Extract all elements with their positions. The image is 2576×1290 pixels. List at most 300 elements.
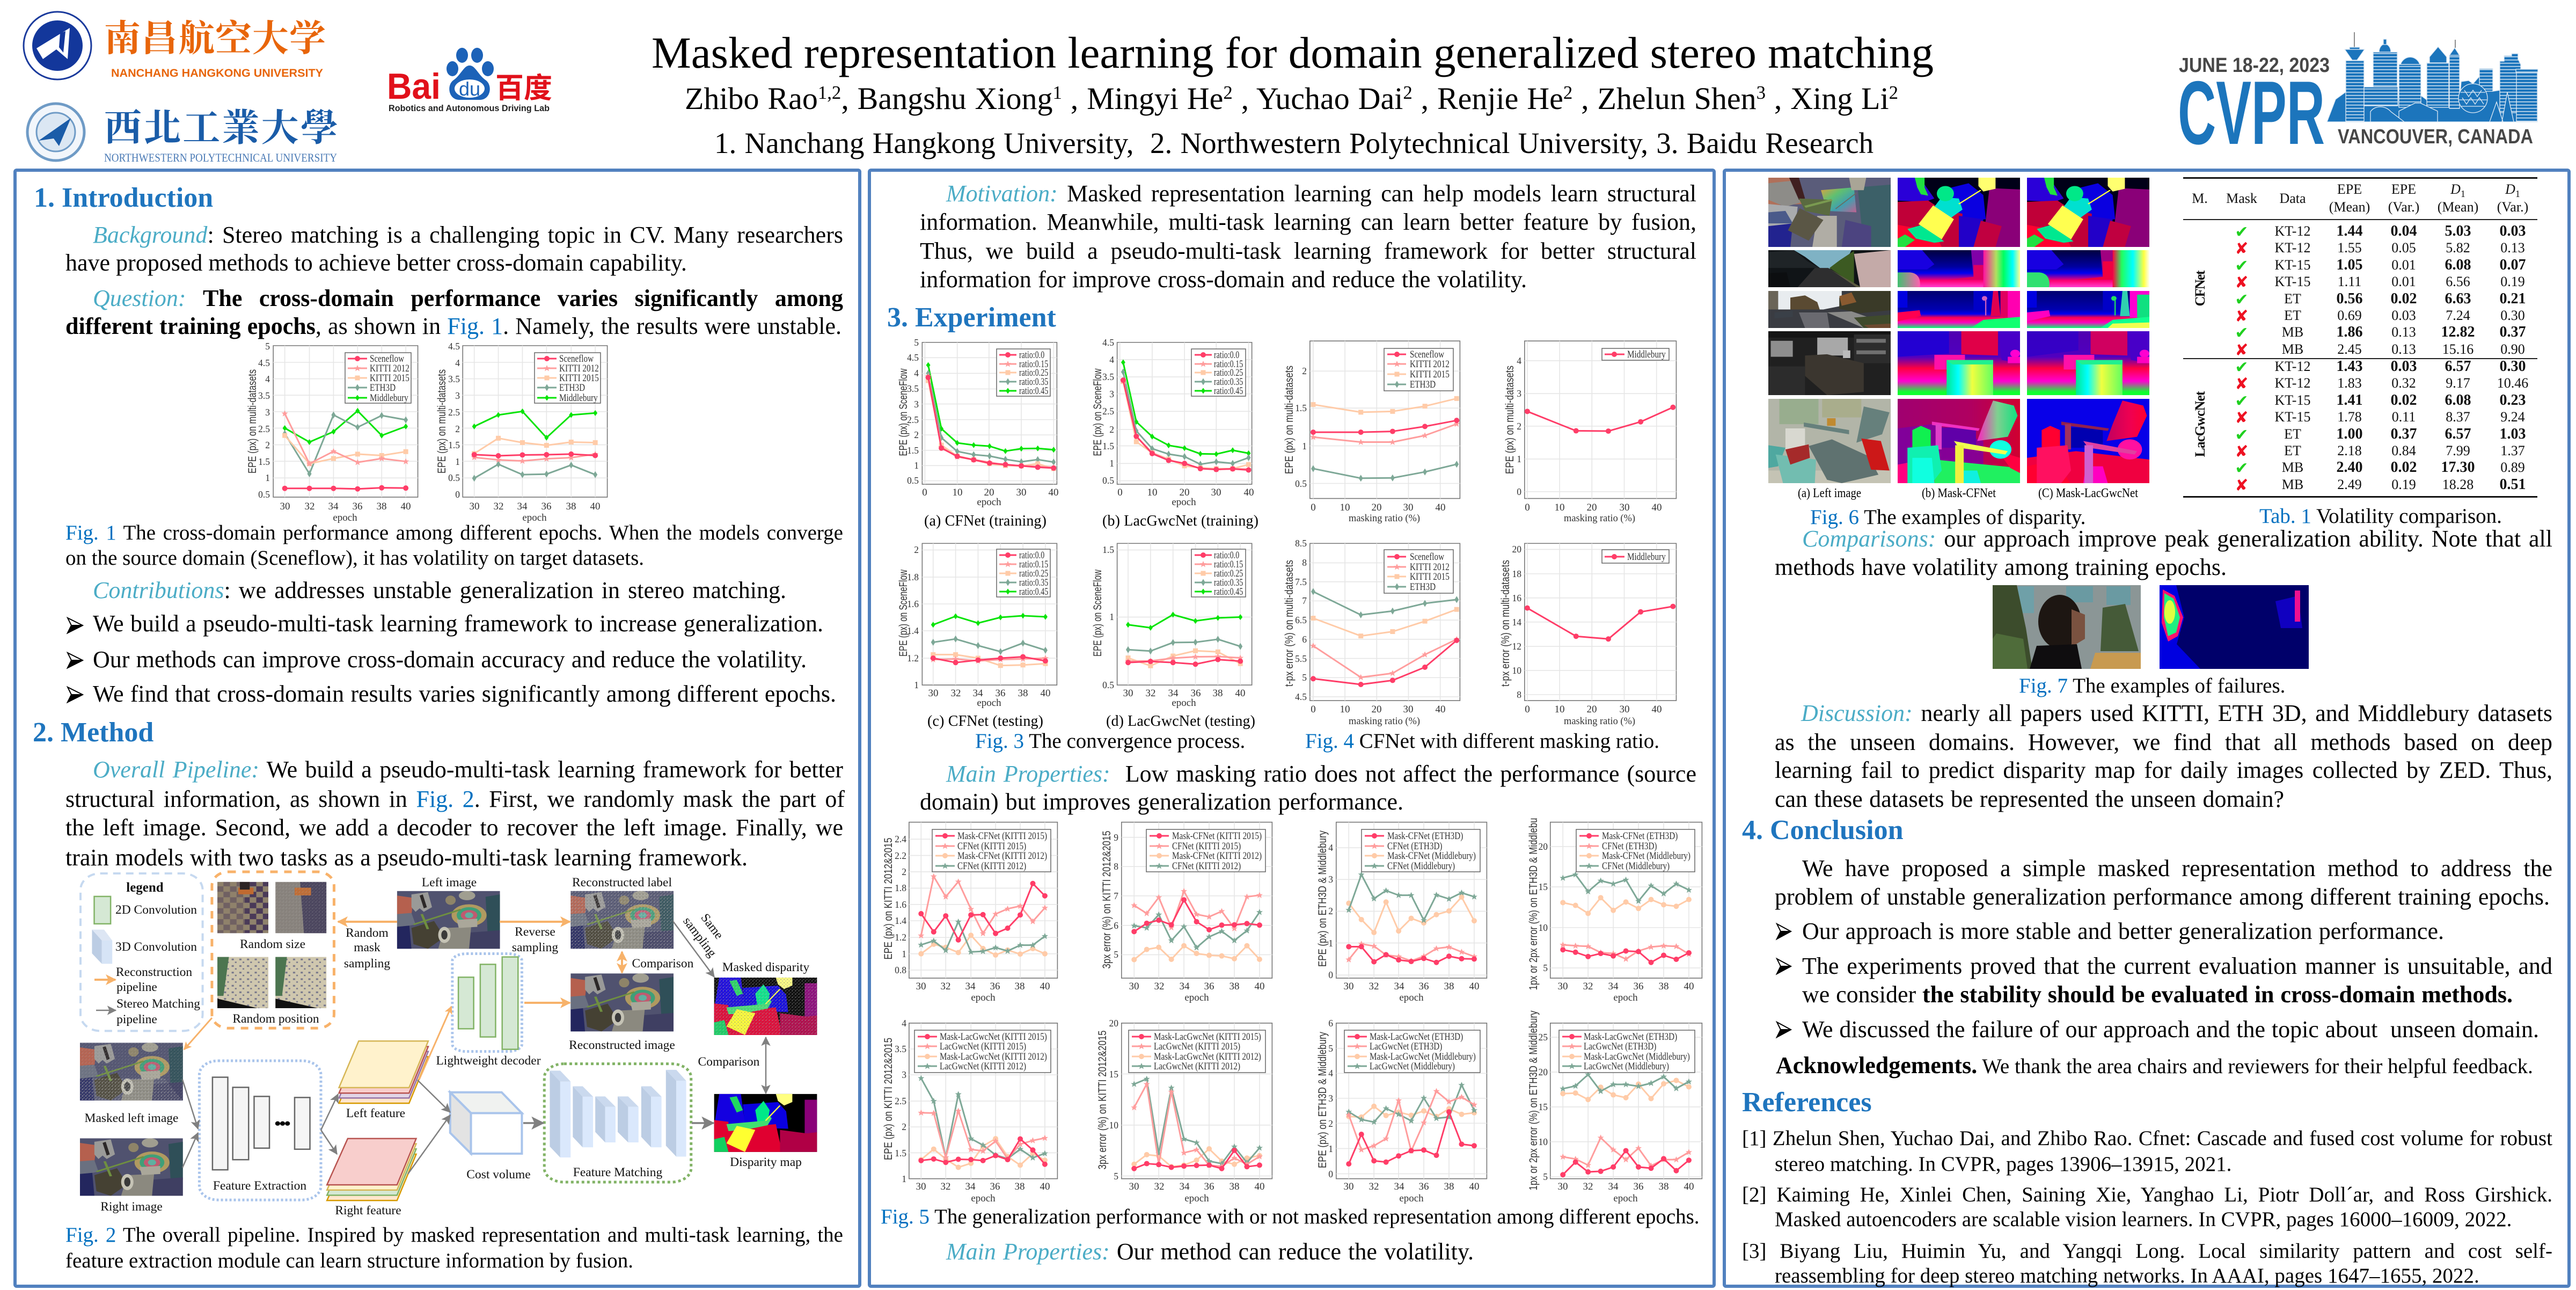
chart: Fig 5 Mask-CFNet EPE ETH3D Middlebury: 32 [1368,981,1379,992]
logo: Baidu: Robotics and Autonomous Driving Lab [389,103,550,113]
caption: Fig 7: Fig. 7 The examples of failures. [2019,674,2285,697]
CFNet rows: ✘ [2235,239,2249,258]
legend: KITTI 2012 [1410,358,1450,369]
chart: Fig 4 EPE vs masking ratio: 2 [1302,366,1307,376]
CFNet rows: 0.03 [2391,308,2416,323]
location: VANCOUVER, CANADA [2338,126,2533,148]
labels: Reconstruction [116,965,192,979]
chart: Fig 5 Mask-LacGwcNet 1px or 2px ETH3D Middlebury: epoch [1613,1193,1638,1204]
chart: Fig 3a CFNet training [897,337,1058,508]
chart: Fig 4 EPE vs masking ratio: 30 [1403,502,1414,513]
chart: Fig 1 left, EPE on multi-datasets: 2 [265,440,270,450]
image captions: (b) Mask-CFNet [1922,486,1996,500]
row 5 [1768,399,2149,483]
chart: Fig 3c CFNet testing: EPE (px) on SceneFlow [897,569,910,657]
panel: right column frame [1724,170,2569,1286]
logo: CVPR 2023 Vancouver [2178,32,2538,163]
LacGwcNet rows: KT-15 [2275,392,2310,408]
chart: Fig 3d LacGwcNet testing: 38 [1213,688,1223,699]
table header: EPE [2337,181,2362,197]
text: discussion: as the unseen domains. However, we find that all methods based on deep [1775,729,2552,755]
chart: Fig 4 t-px error Middlebury: 12 [1512,641,1521,652]
text: comparisons [1775,525,2552,581]
chart: Fig 1 right, EPE on multi-datasets: 2.5 [448,407,460,418]
LacGwcNet rows: 1.41 [2337,392,2362,409]
chart: Fig 5 Mask-CFNet 3px KITTI: 6 [1114,920,1118,931]
legend: Mask-LacGwcNet (KITTI 2015) [1154,1031,1261,1042]
chart: Fig 5 Mask-LacGwcNet EPE KITTI: epoch [971,1193,996,1204]
chart: Fig 4 t-px error Middlebury: 16 [1512,593,1521,603]
CFNet rows: KT-15 [2275,274,2310,289]
labels [85,876,810,1218]
labels: Reconstructed image [569,1038,675,1052]
chart: Fig 5 Mask-CFNet EPE ETH3D Middlebury: 30 [1344,981,1353,992]
chart: Fig 5 Mask-CFNet 3px KITTI: 7 [1114,891,1118,901]
LacGwcNet rows: 0.37 [2390,426,2417,442]
chart: Fig 4 EPE Middlebury: 0 [1517,486,1521,497]
chart: Fig 3a CFNet training: 1.5 [907,445,919,456]
labels: Comparison [698,1055,760,1069]
CFNet rows: 0.01 [2391,257,2416,273]
CFNet rows: 0.07 [2500,257,2526,273]
chart: Fig 5 Mask-LacGwcNet 3px KITTI: 38 [1229,1181,1240,1192]
images [397,891,500,949]
legend: CFNet (KITTI 2012) [1172,860,1241,871]
chart: Fig 5 Mask-LacGwcNet EPE ETH3D Middlebury [1316,1018,1487,1204]
rotated labels: CFNet [2192,270,2208,306]
chart: Fig 5 Mask-CFNet EPE KITTI: EPE (px) on KITTI 2012&2015 [882,837,895,960]
labels: Masked left image [85,1111,178,1125]
chart: Fig 3b LacGwcNet training: 0.5 [1102,475,1114,486]
legend: LacGwcNet (KITTI 2012) [940,1060,1026,1072]
labels: Right feature [335,1204,401,1218]
chart: Fig 3c CFNet testing: 1.8 [907,572,919,582]
chart: Fig 1 left, EPE on multi-datasets: 32 [305,501,314,512]
legend: Mask-CFNet (Middlebury) [1387,850,1476,861]
legend [1344,1030,1480,1073]
legend: ETH3D [1410,581,1436,592]
LacGwcNet rows [2235,358,2528,495]
chart: Fig 5 Mask-CFNet EPE KITTI: 38 [1014,981,1025,992]
LacGwcNet rows: 17.30 [2441,459,2475,476]
list: references: Masked autoencoders are scalable vision learners. In CVPR, pages 16000–16009, 2022. [1775,1208,2512,1231]
chart: Fig 5 Mask-LacGwcNet EPE KITTI: 3.5 [895,1044,906,1054]
chart: Fig 4 t-px error Middlebury: 30 [1620,704,1629,715]
LacGwcNet rows: 0.30 [2500,358,2526,375]
text: motivation: Thus, we build a pseudo-multi-task learning framework for better structural [920,238,1696,264]
chart: Fig 3c CFNet testing: 1.2 [907,653,919,664]
chart: Fig 3d LacGwcNet testing: 36 [1190,688,1201,699]
chart: Fig 5 Mask-LacGwcNet EPE KITTI: 38 [1014,1181,1025,1192]
chart: Fig 5 Mask-CFNet EPE KITTI: 1 [902,949,906,959]
chart: Fig 5 Mask-LacGwcNet 3px KITTI: 20 [1109,1018,1118,1029]
legend [1191,549,1246,597]
text: discussion [1775,699,2552,813]
chart: Fig 3d LacGwcNet testing: 40 [1235,688,1245,699]
LacGwcNet rows: 9.24 [2500,409,2525,425]
chart: Fig 5 Mask-LacGwcNet EPE KITTI: EPE (px) on KITTI 2012&2015 [882,1038,895,1160]
LacGwcNet rows: 8.37 [2446,409,2470,425]
LacGwcNet rows: 2.49 [2337,477,2362,492]
legend [932,829,1051,872]
chart: Fig 5 Mask-LacGwcNet EPE KITTI [882,1018,1057,1204]
text: question [65,285,843,339]
legend [535,353,601,403]
legend: Sceneflow [370,353,405,364]
chart: Fig 3b LacGwcNet training: 4.5 [1102,337,1114,348]
chart: Fig 5 Mask-CFNet EPE KITTI: 0.8 [895,965,906,975]
labels: pipeline [116,1012,157,1026]
LacGwcNet rows: 1.00 [2337,426,2362,442]
chart: Fig 4 EPE Middlebury: 40 [1652,502,1662,513]
chart: Fig 5 Mask-CFNet 3px KITTI: 38 [1229,981,1240,992]
LacGwcNet rows: ✘ [2235,409,2249,427]
chart: Fig 1 left, EPE on multi-datasets: 3.5 [258,390,270,401]
text: acknowledgements: Acknowledgements. We thank the area chairs and reviewers for their helpful feedback. [1776,1052,2533,1078]
legend: CFNet (KITTI 2012) [957,860,1026,871]
table header: (Mean) [2329,199,2370,215]
LacGwcNet rows: ✘ [2235,375,2249,393]
CFNet rows: 5.82 [2446,240,2470,256]
chart: Fig 5 Mask-LacGwcNet EPE ETH3D Middlebury: 4 [1328,1068,1333,1078]
legend: Mask-CFNet (ETH3D) [1387,830,1463,841]
CFNet rows: 0.19 [2500,274,2525,289]
chart: Fig 4 t-px error Middlebury [1499,543,1676,727]
chart: Fig 4 EPE Middlebury: 1 [1517,454,1521,464]
CFNet rows: 0.13 [2391,324,2416,340]
caption: Fig 1: on the source domain (Sceneflow), it has volatility on target datasets. [65,546,644,570]
text: discussion: Discussion: nearly all papers used KITTI, ETH 3D, and Middlebury datasets [1801,700,2552,726]
LacGwcNet rows: ✔ [2235,392,2249,411]
chart: Fig 4 t-px error multi-datasets: 4.5 [1295,691,1307,702]
legend: ratio:0.0 [1214,349,1239,361]
captions: Fig 3 bottom row [927,713,1255,730]
chart: Fig 3b LacGwcNet training: 30 [1211,487,1221,498]
LacGwcNet rows: 0.02 [2390,459,2417,476]
legend: Mask-LacGwcNet (Middlebury) [1370,1051,1476,1062]
CFNet rows: KT-12 [2275,240,2310,256]
chart: Fig 4 EPE vs masking ratio: EPE (px) on multi-datasets [1283,366,1296,474]
legend [1191,349,1246,397]
LacGwcNet rows: ET [2284,426,2301,442]
chart: Fig 4 t-px error multi-datasets [1283,538,1460,727]
text: discussion: learning fail to predict disparity map for daily images collected by ZED. Thus, [1775,757,2552,783]
chart: Fig 5 Mask-CFNet EPE ETH3D Middlebury [1316,822,1487,1003]
row 2 [1768,250,2149,287]
text: main properties 1 [920,760,1696,817]
chart: Fig 3a CFNet training: 2 [914,429,919,440]
panel: middle column frame [869,170,1714,1286]
chart: Fig 4 t-px error Middlebury: 18 [1512,569,1521,579]
chart: Fig 5 Mask-CFNet 1px or 2px ETH3D Middlebury: 34 [1608,981,1619,992]
legend: Middlebury [1627,348,1666,360]
chart: Fig 3b LacGwcNet training: 2 [1109,424,1114,435]
text: background [65,222,843,276]
chart: Fig 5 Mask-LacGwcNet EPE KITTI: 34 [965,1181,976,1192]
labels: Random size [240,937,305,951]
chart: Fig 1 right, EPE on multi-datasets: 30 [469,501,480,512]
chart: Fig 5 Mask-LacGwcNet EPE ETH3D Middlebury: 0 [1328,1169,1333,1179]
chart: Fig 4 EPE Middlebury: 20 [1586,502,1597,513]
chart: Fig 3b LacGwcNet training: EPE (px) on SceneFlow [1092,368,1104,456]
chart: Fig 3c CFNet testing [897,543,1057,709]
table header: D [2505,181,2515,197]
legend: Mask-CFNet (KITTI 2012) [1172,850,1262,861]
text: motivation [920,180,1696,294]
labels: Same [698,911,726,942]
labels: Disparity map [730,1155,802,1169]
chart: Fig 5 Mask-CFNet EPE KITTI: 1.8 [895,883,906,893]
legend: ratio:0.45 [1214,586,1243,597]
legend: LacGwcNet (KITTI 2012) [1154,1060,1240,1072]
table header: 1 [2461,188,2465,199]
labels: sampling [344,957,390,971]
table: Tab 1 volatility comparison [2183,178,2537,497]
chart: Fig 3a CFNet training: 40 [1049,487,1058,498]
CFNet rows: 7.24 [2446,308,2470,323]
chart: Fig 3d LacGwcNet testing: 1.5 [1102,544,1114,555]
legend: Mask-CFNet (KITTI 2015) [1172,830,1262,841]
chart: Fig 3a CFNet training: 2.5 [907,414,919,425]
chart: Fig 5 Mask-CFNet EPE KITTI [882,822,1057,1003]
CFNet rows: ✘ [2235,307,2249,326]
rotated labels [2192,270,2208,457]
CFNet rows: 6.56 [2446,274,2470,289]
legend: Mask-LacGwcNet (KITTI 2012) [1154,1051,1261,1062]
labels: legend [126,880,164,895]
legend: ratio:0.45 [1214,385,1243,397]
chart: Fig 5 Mask-LacGwcNet 3px KITTI: 15 [1109,1069,1118,1080]
chart: Fig 4 EPE vs masking ratio: 10 [1340,502,1350,513]
chart: Fig 3c CFNet testing: 40 [1040,688,1051,699]
chart: Fig 5 Mask-LacGwcNet 1px or 2px ETH3D Middlebury [1527,1010,1702,1204]
legend: Mask-CFNet (KITTI 2015) [957,830,1047,841]
legend: CFNet (ETH3D) [1602,840,1657,851]
chart: Fig 5 Mask-CFNet 3px KITTI: 34 [1180,981,1190,992]
chart: Fig 4 t-px error multi-datasets: 40 [1435,704,1446,715]
list: contributions: Our methods can improve cross-domain accuracy and reduce the volatility. [93,646,807,673]
chart: Fig 3a CFNet training: 20 [984,487,994,498]
text: question: Question: The cross-domain performance varies significantly among [93,285,843,311]
chart: Fig 3a CFNet training: 0.5 [907,475,919,486]
chart: Fig 5 Mask-LacGwcNet EPE ETH3D Middlebury: 3 [1328,1093,1333,1104]
chart: Fig 4 t-px error multi-datasets: masking ratio (%) [1349,716,1420,727]
chart: Fig 3d LacGwcNet testing: 30 [1123,688,1133,699]
chart: Fig 5 Mask-LacGwcNet EPE ETH3D Middlebury: 5 [1328,1043,1333,1054]
chart: Fig 4 EPE Middlebury: masking ratio (%) [1564,513,1635,524]
chart: Fig 5 Mask-CFNet 3px KITTI: 3px error (%) on KITTI 2012&2015 [1101,831,1113,968]
chart: Fig 5 Mask-CFNet EPE KITTI: 36 [990,981,1000,992]
chart: Fig 5 Mask-LacGwcNet 1px or 2px ETH3D Middlebury: 36 [1634,1181,1643,1192]
chart: Fig 5 Mask-CFNet EPE ETH3D Middlebury: 1 [1328,938,1333,949]
chart: Fig 4 t-px error Middlebury: 40 [1652,704,1662,715]
legend: CFNet (KITTI 2015) [1172,840,1241,851]
random mask samples box [212,872,334,1028]
logo text: NCHU Chinese: 南昌航空大学 [104,18,326,59]
chart: Fig 3b LacGwcNet training: epoch [1172,497,1196,508]
chart: Fig 5 Mask-LacGwcNet 1px or 2px ETH3D Middlebury: 5 [1543,1171,1548,1182]
chart: Fig 4 t-px error Middlebury: 10 [1512,665,1521,676]
LacGwcNet rows: KT-15 [2275,409,2310,425]
legend: ratio:0.15 [1214,358,1243,370]
chart: Fig 5 Mask-LacGwcNet EPE KITTI: 30 [916,1181,926,1192]
text: discussion: can these datasets be represented the unseen domain? [1775,786,2284,812]
chart: Fig 4 t-px error multi-datasets: 6 [1302,634,1307,645]
logo: Nanchang Hangkong University [24,12,326,79]
chart: Fig 4 t-px error Middlebury: 8 [1517,689,1521,700]
arrows [94,921,766,1174]
legend: Middlebury [1627,551,1666,562]
caption: Fig 2: feature extraction module can learn structure information by fusion. [65,1249,633,1272]
legend: LacGwcNet (ETH3D) [1370,1040,1442,1052]
chart: Fig 1 left, EPE on multi-datasets: 2.5 [258,424,270,434]
labels: Masked disparity [722,960,810,974]
chart: Fig 5 Mask-LacGwcNet 1px or 2px ETH3D Middlebury: 25 [1538,1032,1548,1043]
chart: Fig 3a CFNet training: 30 [1016,487,1026,498]
chart: Fig 5 Mask-CFNet 1px or 2px ETH3D Middlebury: epoch [1613,992,1638,1003]
chart: Fig 5 Mask-CFNet 1px or 2px ETH3D Middlebury: 1px or 2px error (%) on ETH3D & Middlebu [1527,818,1540,990]
list: conclusion: we consider the stability should be evaluated in cross-domain methods. [1802,981,2513,1008]
chart: Fig 3a CFNet training: 4 [914,368,919,378]
labels: 3D Convolution [115,940,197,954]
chart: Fig 5 Mask-LacGwcNet 1px or 2px ETH3D Middlebury: 30 [1557,1181,1568,1192]
chart: Fig 5 Mask-LacGwcNet 1px or 2px ETH3D Middlebury: 32 [1583,1181,1593,1192]
chart: Fig 1 right, EPE on multi-datasets [436,341,608,523]
chart: Fig 4 t-px error multi-datasets: 5 [1302,672,1307,683]
chart: Fig 5 Mask-LacGwcNet EPE KITTI: 36 [990,1181,1000,1192]
chart: Fig 5 Mask-LacGwcNet 3px KITTI: epoch [1184,1193,1209,1204]
text: motivation: information for improve cross-domain and reduce the volatility. [920,266,1527,293]
caption: Fig 1 [65,519,843,575]
chart: Fig 1 left, EPE on multi-datasets: 1 [265,472,270,483]
title: Masked representation learning for domain generalized stereo matching [652,28,1934,77]
chart: Fig 3c CFNet testing: 32 [951,688,961,699]
CFNet rows: ✘ [2235,341,2249,360]
LacGwcNet rows: ET [2284,443,2301,458]
list: conclusion: Our approach is more stable and better generalization performance. [1802,918,2444,944]
legend: Mask-LacGwcNet (Middlebury) [1584,1051,1690,1062]
labels: Left image [422,876,477,890]
date: JUNE 18-22, 2023 [2179,54,2330,77]
chart: Fig 5 Mask-CFNet EPE KITTI: 34 [965,981,976,992]
chart: Fig 5 Mask-LacGwcNet 3px KITTI: 3px error (%) on KITTI 2012&2015 [1096,1031,1109,1169]
chart: Fig 5 Mask-LacGwcNet EPE ETH3D Middlebury: epoch [1399,1193,1424,1204]
legend [1129,1030,1265,1073]
chart: Fig 5 Mask-CFNet EPE ETH3D Middlebury: 36 [1419,981,1429,992]
list: conclusion: We discussed the failure of our approach and the topic about unseen domain. [1802,1016,2539,1043]
legend: ratio:0.25 [1019,567,1048,579]
chart: Fig 5 Mask-LacGwcNet EPE KITTI: 1.5 [895,1148,906,1158]
chart: Fig 3b LacGwcNet training: 40 [1244,487,1254,498]
chart: Fig 3d LacGwcNet testing: epoch [1172,697,1196,709]
chart: Fig 5 Mask-LacGwcNet EPE ETH3D Middlebury: 6 [1328,1018,1333,1029]
legend: ratio:0.0 [1019,349,1044,361]
caption: Fig 4: Fig. 4 CFNet with different masking ratio. [1305,730,1659,753]
text: conclusion: We have proposed a simple masked representation method to address the [1802,855,2552,881]
chart: Fig 1 right, EPE on multi-datasets: 4.5 [448,341,460,352]
heading: References: References [1742,1087,1872,1118]
CFNet rows: 0.56 [2337,290,2362,307]
CFNet rows: 0.13 [2391,341,2416,357]
LacGwcNet rows: 2.40 [2337,459,2362,476]
chart: Fig 5 Mask-CFNet EPE ETH3D Middlebury: 3 [1328,874,1333,885]
chart: Fig 5 Mask-LacGwcNet 3px KITTI: 40 [1255,1181,1264,1192]
legend: ratio:0.15 [1019,558,1048,570]
chart: Fig 4 t-px error multi-datasets: 6.5 [1295,615,1307,625]
LacGwcNet rows: 6.57 [2445,358,2471,375]
chart: Fig 1 right, EPE on multi-datasets: 1.5 [448,440,460,450]
labels: Random position [232,1012,319,1026]
chart: Fig 1 right, EPE on multi-datasets: 0 [455,489,460,500]
labels: Left feature [346,1106,405,1120]
row 3 [1768,291,2149,328]
CFNet rows: 1.86 [2337,324,2362,340]
chart: Fig 4 EPE vs masking ratio: 1 [1302,441,1307,451]
chart: Fig 4 t-px error multi-datasets: 5.5 [1295,653,1307,664]
chart: Fig 1 left, EPE on multi-datasets: 38 [377,501,386,512]
logo: Baidu: du [459,78,480,100]
chart: Fig 5 Mask-LacGwcNet EPE ETH3D Middlebury: 1 [1328,1143,1333,1154]
legend: ratio:0.45 [1019,586,1048,597]
legend: KITTI 2015 [1410,368,1450,380]
text: overall pipeline: the left image. Second, we add a decoder to recover the left image. Finally, we [65,814,843,841]
legend: Mask-LacGwcNet (ETH3D) [1584,1031,1677,1042]
chart: Fig 5 Mask-LacGwcNet 1px or 2px ETH3D Middlebury: 1px or 2px error (%) on ETH3D & Middlebury [1527,1010,1540,1191]
chart: Fig 1 left, EPE on multi-datasets: EPE (px) on multi-datasets [246,369,259,473]
rotated labels: LacGwcNet [2192,391,2208,457]
chart: Fig 5 Mask-LacGwcNet EPE KITTI: 1 [902,1174,906,1184]
chart: Fig 4 t-px error multi-datasets: 7 [1302,595,1307,606]
chart: Fig 5 Mask-LacGwcNet EPE KITTI: 32 [940,1181,951,1192]
legend: KITTI 2012 [370,362,409,374]
feature extraction [199,1061,321,1200]
legend: CFNet (Middlebury) [1602,860,1670,871]
chart: Fig 3c CFNet testing: 38 [1018,688,1028,699]
legend: LacGwcNet (Middlebury) [1370,1060,1455,1072]
legend: ratio:0.35 [1019,577,1048,588]
legend: CFNet (Middlebury) [1387,860,1455,871]
chart: Fig 5 Mask-CFNet 1px or 2px ETH3D Middlebury: 15 [1538,881,1548,892]
chart: Fig 5 Mask-LacGwcNet EPE ETH3D Middlebury: 32 [1368,1181,1379,1192]
legend: ratio:0.0 [1214,549,1239,561]
LacGwcNet rows: 2.18 [2337,443,2362,458]
legend: Mask-CFNet (ETH3D) [1602,830,1678,841]
CFNet rows: ✔ [2235,324,2249,342]
legend: LacGwcNet (KITTI 2015) [1154,1040,1240,1052]
caption: Fig 1: Fig. 1 The cross-domain performance among different epochs. When the models converge [65,521,843,544]
logo: Northwestern Polytechnical University [27,104,338,164]
LacGwcNet rows: 9.17 [2446,375,2470,391]
chart: Fig 4 EPE Middlebury: EPE (px) on multi-datasets [1504,366,1516,474]
chart: Fig 5 Mask-CFNet EPE KITTI: 30 [916,981,926,992]
chart: Fig 4 EPE vs masking ratio: 20 [1372,502,1381,513]
CFNet rows: 0.04 [2390,223,2417,239]
legend [1602,348,1669,360]
chart: Fig 5 Mask-CFNet 3px KITTI: 9 [1114,832,1118,843]
chart: Fig 5 Mask-LacGwcNet 1px or 2px ETH3D Middlebury: 40 [1684,1181,1694,1192]
chart: Fig 4 t-px error multi-datasets: 7.5 [1295,577,1307,587]
chart: Fig 3c CFNet testing: 1.6 [907,599,919,609]
legend [1362,829,1480,872]
chart: Fig 5 Mask-LacGwcNet 3px KITTI [1096,1018,1272,1204]
text: overall pipeline [65,756,845,874]
chart: Fig 5 Mask-LacGwcNet 3px KITTI: 34 [1180,1181,1190,1192]
chart: Fig 5 Mask-CFNet EPE KITTI: 1.4 [895,915,906,926]
chart: Fig 5 Mask-LacGwcNet 3px KITTI: 32 [1154,1181,1165,1192]
legend: ETH3D [370,382,396,393]
chart: Fig 1 left, EPE on multi-datasets: 34 [328,501,339,512]
chart: Fig 5 Mask-CFNet EPE ETH3D Middlebury: 4 [1328,842,1333,853]
